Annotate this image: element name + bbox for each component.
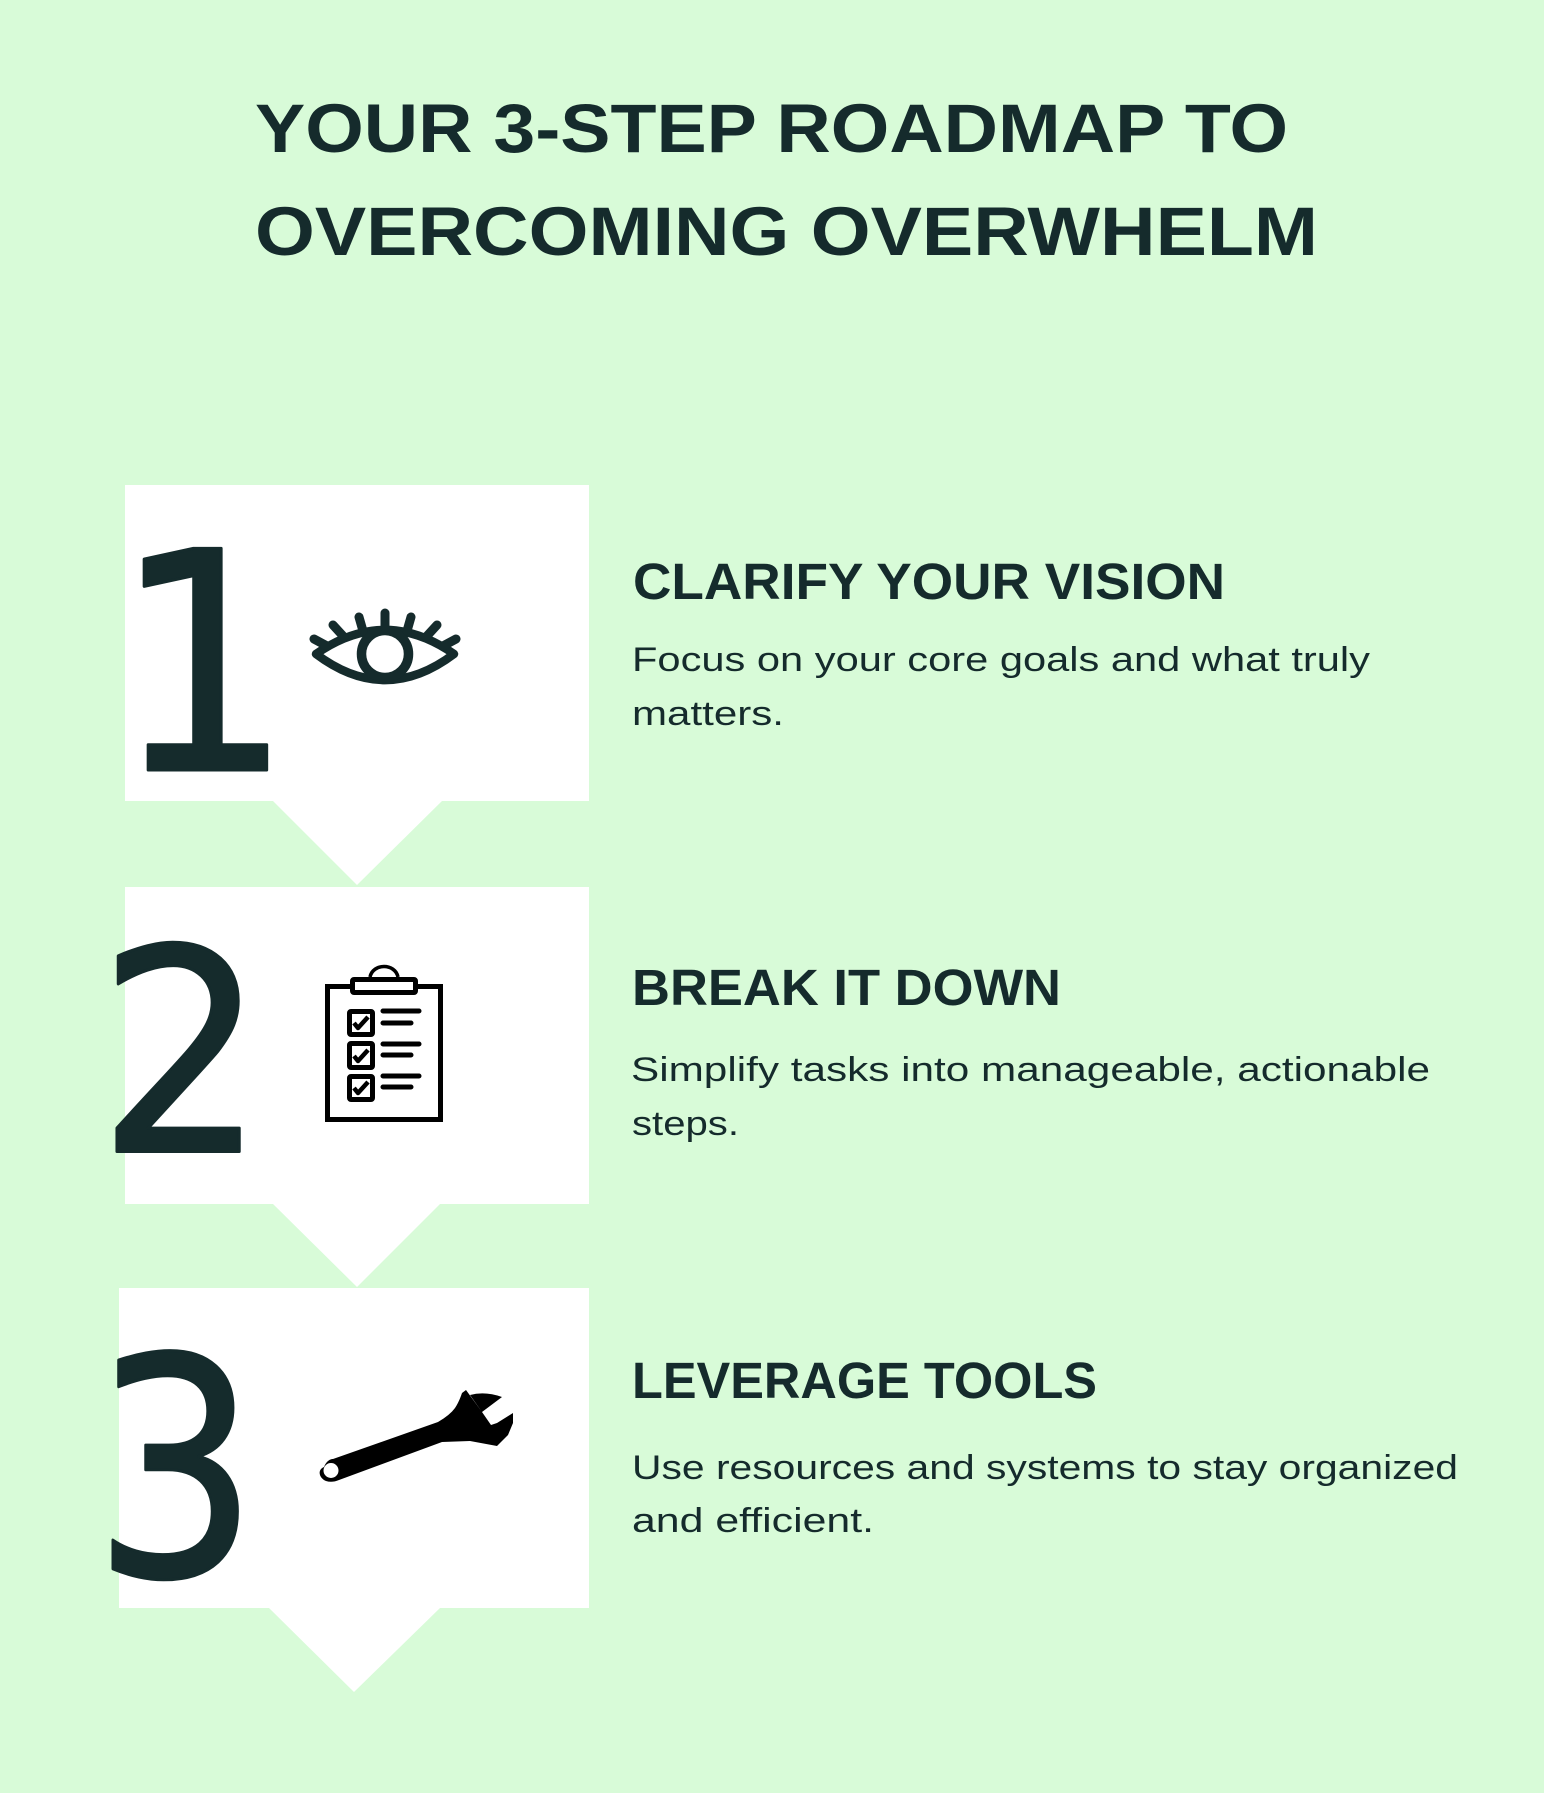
panel: step 3	[93, 1288, 589, 1692]
panel: step 2	[98, 887, 589, 1287]
title: OVERCOMING OVERWHELM	[255, 193, 1318, 270]
step 3 number: 3	[93, 1294, 258, 1647]
text: step 1 description: matters.	[632, 695, 784, 733]
heading: step 2: BREAK IT DOWN	[632, 959, 1061, 1016]
text: step 3 description: Use resources and systems to stay organized	[632, 1449, 1458, 1487]
step 2 callout shape	[125, 887, 589, 1287]
text: step 2 description	[631, 1051, 1430, 1143]
step 2 number: 2	[98, 891, 266, 1219]
panel: step 1	[113, 485, 589, 885]
heading: step 1: CLARIFY YOUR VISION	[633, 553, 1225, 610]
step 1 callout shape	[125, 485, 589, 885]
icon: clipboard checklist	[328, 966, 440, 1120]
title: YOUR 3-STEP ROADMAP TO	[255, 90, 1288, 167]
step 1 number: 1	[113, 489, 293, 842]
step 3 callout shape	[119, 1288, 589, 1692]
title	[255, 90, 1318, 270]
text: step 1 description	[632, 641, 1370, 733]
icon: eye	[314, 613, 456, 680]
text: step 3 description: and efficient.	[632, 1502, 874, 1540]
text: step 2 description: steps.	[632, 1105, 739, 1143]
heading: step 3: LEVERAGE TOOLS	[632, 1352, 1097, 1409]
icon: wrench	[320, 1390, 513, 1482]
text: step 3 description	[632, 1449, 1458, 1540]
text: step 2 description: Simplify tasks into manageable, actionable	[631, 1051, 1430, 1089]
text: step 1 description: Focus on your core goals and what truly	[632, 641, 1370, 679]
